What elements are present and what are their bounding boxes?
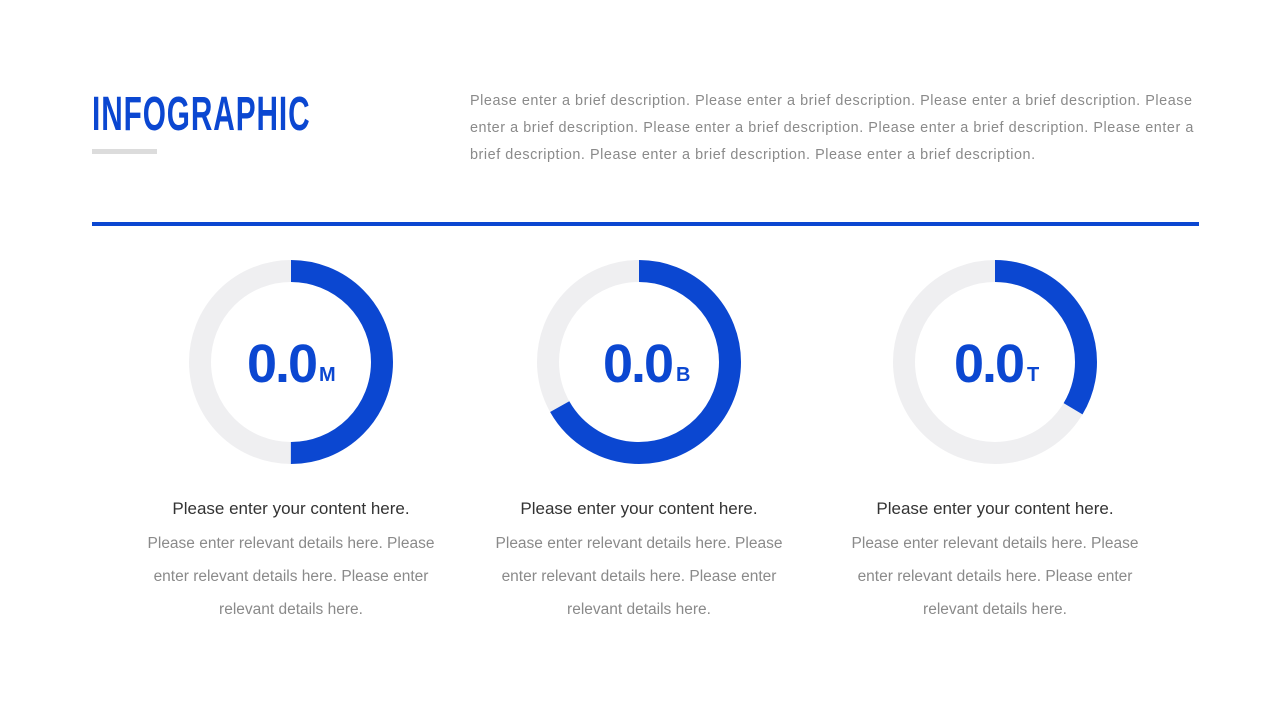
donut 3: 0.0 [954,334,1023,394]
card 3 text: Please enter your content here. [876,499,1114,518]
card 2 text: Please enter your content here. [520,499,758,518]
blue divider [92,222,1199,226]
card 3 text [852,499,1138,618]
title underline [92,149,157,154]
card 1 text: Please enter relevant details here. Please enter relevant details here. Please enter relevant details here. [148,535,434,618]
donut 1: 0.0 [247,334,316,394]
card 2 text: Please enter relevant details here. Please enter relevant details here. Please enter relevant details here. [496,535,782,618]
title: INFOGRAPHIC [92,88,311,141]
donut 3: T [1027,364,1039,386]
card 2 text [496,499,782,618]
description: Please enter a brief description. Please enter a brief description. Please enter a brief description. Please enter a brief description. Please enter a brief description. Please enter a brief description. Please enter a brief description. Please enter a brief description. Please enter a brief description. [470,93,1194,163]
card 1 text [148,499,434,618]
donut 1 [200,271,382,453]
donut 1: M [319,364,336,386]
donut 3 [904,271,1086,453]
donut 2 [548,271,730,453]
donut 2: B [676,364,690,386]
donut 2: 0.0 [603,334,672,394]
card 1 text: Please enter your content here. [172,499,410,518]
card 3 text: Please enter relevant details here. Please enter relevant details here. Please enter relevant details here. [852,535,1138,618]
